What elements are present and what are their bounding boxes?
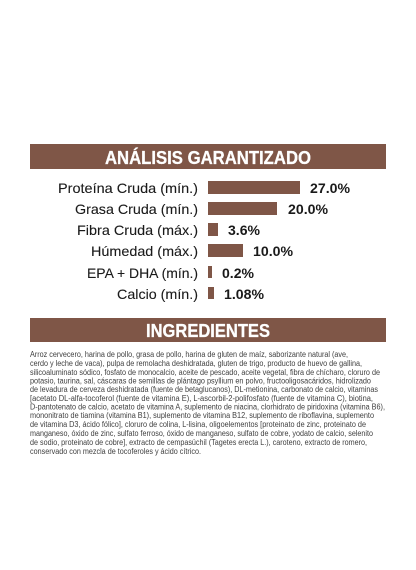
row: húmedad: 10.0% xyxy=(253,243,294,259)
row: calcio xyxy=(117,286,265,302)
text block: ingredient list: [acetato DL-alfa-tocoferol (fuente de vitamina E), L-ascorbil-2-polifosfato (fuente de vitamina C), biotina, xyxy=(30,394,373,403)
text block: ingredient list: D-pantotenato de calcio, acetato de vitamina A, suplemento de niacina, clorhidrato de piridoxina (vitamina B6), xyxy=(30,402,385,412)
row: proteína cruda: 27.0% xyxy=(310,180,351,196)
text block: ingredient list: de levadura de cerveza deshidratada (fuente de betaglucanos), DL-metionina, carbonato de calcio, vitaminas xyxy=(30,385,378,394)
text block: ingredient list: potasio, taurina, sal, cáscaras de semillas de plántago psyllium en polvo, fructooligosacáridos, hidrolizado xyxy=(30,376,371,386)
row: húmedad: Húmedad (máx.) xyxy=(91,243,198,259)
text block: ingredient list: manganeso, óxido de zinc, sulfato ferroso, óxido de manganeso, sulfato de cobre, yodato de calcio, selenito xyxy=(30,429,373,438)
row: fibra cruda xyxy=(77,222,261,238)
row: fibra cruda: 3.6% xyxy=(228,222,261,238)
row: proteína cruda: Proteína Cruda (mín.) xyxy=(58,180,198,196)
row: epa + dha xyxy=(87,265,255,281)
row: epa + dha: EPA + DHA (mín.) xyxy=(87,265,198,281)
row: grasa cruda: Grasa Cruda (mín.) xyxy=(75,201,198,217)
heading: ingredientes: INGREDIENTES xyxy=(146,321,270,341)
text block: ingredient list: cerdo y leche de vaca), pulpa de remolacha deshidratada, gluten de trigo, producto de huevo de gallina, xyxy=(30,359,362,368)
row: calcio: 1.08% xyxy=(224,286,265,302)
panel: análisis garantizado header xyxy=(30,144,386,169)
bar chart: guaranteed analysis xyxy=(58,180,351,302)
row: calcio: Calcio (mín.) xyxy=(117,286,198,302)
row: grasa cruda xyxy=(75,201,329,217)
row: grasa cruda: 20.0% xyxy=(288,201,329,217)
text block: ingredient list: Arroz cervecero, harina de pollo, grasa de pollo, harina de gluten de maíz, saborizante natural (ave, xyxy=(30,350,348,359)
heading: análisis garantizado: ANÁLISIS GARANTIZADO xyxy=(105,147,311,168)
row: fibra cruda: Fibra Cruda (máx.) xyxy=(77,222,198,238)
text block: ingredient list: conservado con mezcla de tocoferoles y ácido cítrico. xyxy=(30,447,201,456)
text block: ingredient list: de vitamina D3, ácido fólico], cloruro de colina, L-lisina, oligoelementos [proteinato de zinc, proteinato de xyxy=(30,420,366,429)
text block: ingredient list: de sodio, proteinato de cobre], extracto de cempasúchil (Tagetes erecta L.), caroteno, extracto de romero, xyxy=(30,438,367,447)
text block: ingredient list: mononitrato de tiamina (vitamina B1), suplemento de vitamina B12, suplemento de riboflavina, suplemento xyxy=(30,411,374,420)
row: húmedad xyxy=(91,243,294,259)
panel: ingredientes header xyxy=(30,318,386,342)
text block: ingredient list: silicoaluminato sódico, fosfato de monocalcio, aceite de pescado, aceite vegetal, fibra de chícharo, cloruro de xyxy=(30,368,380,377)
text block: ingredient list xyxy=(30,350,385,456)
row: epa + dha: 0.2% xyxy=(222,265,255,281)
row: proteína cruda xyxy=(58,180,351,196)
